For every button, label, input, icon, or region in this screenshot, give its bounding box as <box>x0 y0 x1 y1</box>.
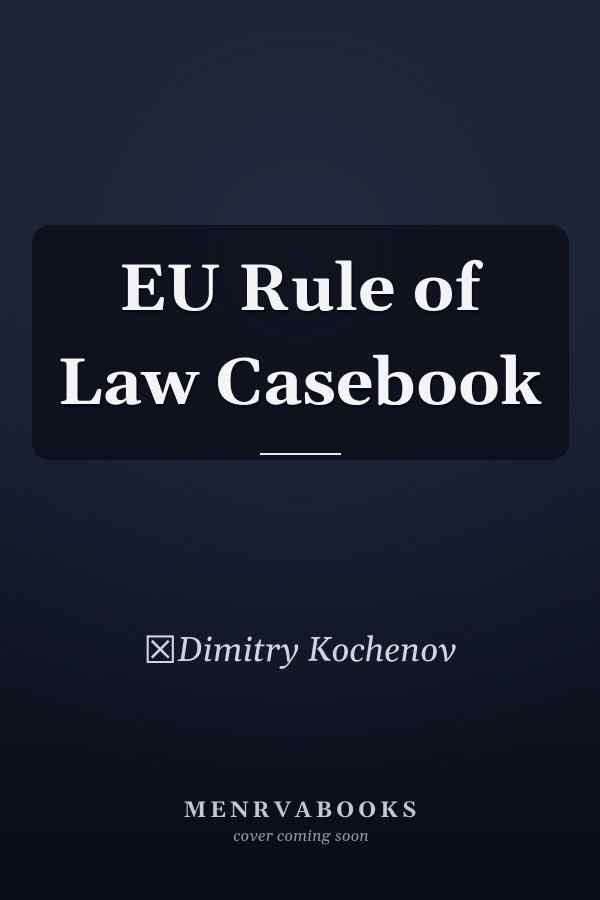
title <box>57 249 542 427</box>
title divider <box>260 453 341 455</box>
title: EU Rule of <box>119 249 480 333</box>
cover note: cover coming soon <box>233 827 369 847</box>
publisher: MENRVABOOKS <box>184 797 420 825</box>
title panel <box>32 225 569 460</box>
title: Law Casebook <box>57 343 542 427</box>
author: ☒Dimitry Kochenov <box>143 628 457 673</box>
